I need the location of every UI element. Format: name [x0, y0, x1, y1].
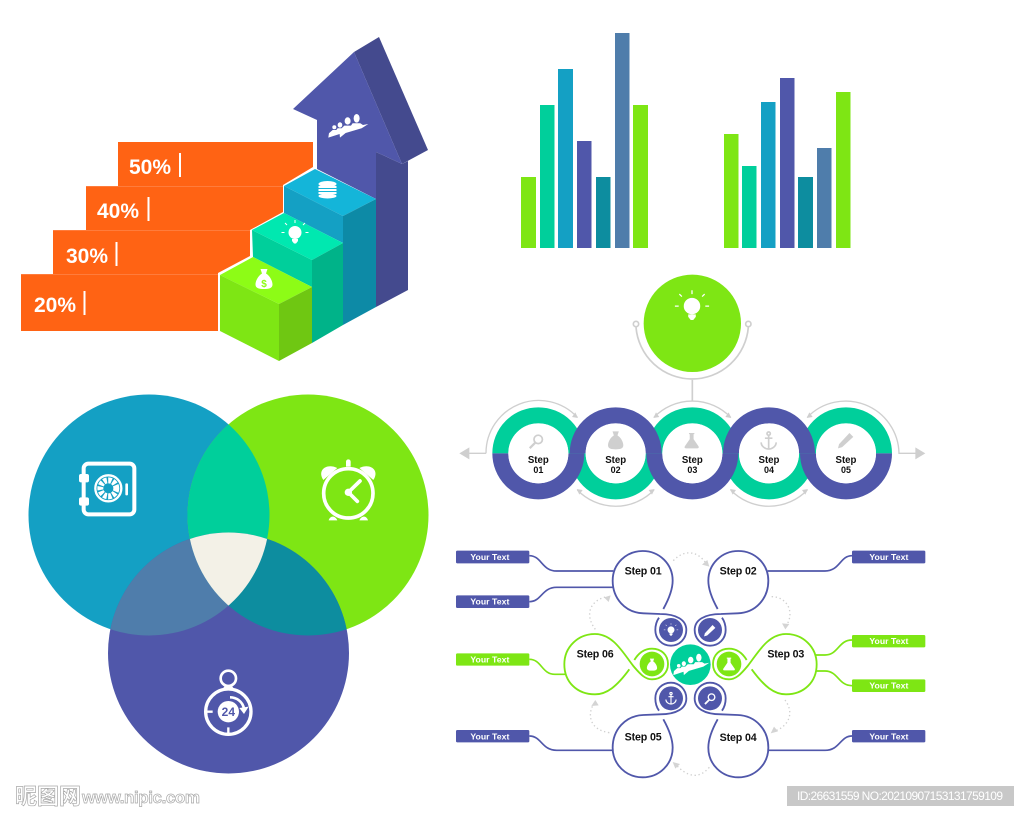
green circle	[188, 394, 428, 636]
step 04	[739, 423, 799, 483]
step 05: Step	[836, 455, 857, 466]
panel: bar chart right	[724, 78, 850, 248]
step 02	[586, 423, 646, 483]
panel: venn diagram	[28, 394, 428, 774]
step titles: Step 02	[720, 566, 757, 578]
your text labels left: Your Text	[470, 655, 509, 665]
icon: money bag	[256, 269, 272, 290]
step 03	[662, 423, 722, 483]
icon: money bag: $	[261, 279, 267, 290]
icon node: flask	[717, 652, 741, 676]
your text labels right: Your Text	[869, 636, 908, 646]
label: 30%: 30%	[66, 245, 108, 268]
centre team circle	[670, 644, 711, 685]
label: 20%: 20%	[34, 294, 76, 317]
panel: six step flower diagram	[456, 551, 925, 777]
step 01: 01	[533, 465, 543, 475]
your text labels right: Your Text	[869, 552, 908, 562]
panel: five step chain	[459, 275, 925, 506]
your text labels right	[852, 551, 925, 742]
icon node: money bag	[640, 652, 664, 676]
your text labels right: Your Text	[869, 731, 908, 741]
teal step	[252, 213, 343, 343]
watermark: nipic logo	[15, 779, 200, 811]
your text labels left: Your Text	[470, 731, 509, 741]
watermark: id box: ID:26631559 NO:20210907153131759109	[797, 789, 1003, 803]
step 01: Step	[528, 455, 549, 466]
your text labels right: Your Text	[869, 681, 908, 691]
overlap of all three	[190, 532, 267, 606]
top green circle with bulb	[644, 275, 741, 372]
watermark: nipic logo: 昵图网	[15, 779, 81, 811]
watermark: id box	[787, 786, 1014, 806]
step 04: Step	[759, 455, 780, 466]
step 06 petal	[564, 634, 668, 694]
step 01	[508, 423, 568, 483]
green ring halves	[500, 415, 884, 491]
step 04: 04	[764, 465, 774, 475]
step titles: Step 05	[625, 732, 662, 744]
step 02: Step	[605, 455, 626, 466]
your text labels left: Your Text	[470, 597, 509, 607]
step titles: Step 06	[577, 649, 614, 661]
panel: isometric growth staircase	[21, 37, 428, 361]
blue circle	[28, 394, 270, 636]
icon: 24 hour stopwatch: 24	[222, 705, 235, 719]
icon node: pencil	[698, 618, 722, 642]
step 01 petal	[613, 551, 686, 646]
step titles	[577, 566, 804, 744]
overlap green and purple	[190, 532, 347, 636]
icon node: anchor	[659, 686, 683, 710]
step 02 petal	[695, 551, 768, 646]
dotted flow arrows	[590, 553, 790, 775]
step 03: Step	[682, 455, 703, 466]
connector lines	[529, 556, 852, 750]
overlap blue and purple	[110, 532, 267, 636]
step titles: Step 01	[625, 566, 662, 578]
blue step	[284, 169, 376, 325]
step 03: 03	[687, 465, 697, 475]
icon: light bulb	[282, 220, 308, 244]
label: 40%: 40%	[97, 200, 139, 223]
panel: bar chart left	[521, 33, 648, 248]
connector arc below top circle	[633, 321, 751, 401]
purple growth arrow	[293, 37, 428, 307]
green step	[220, 257, 312, 361]
step titles: Step 04	[720, 732, 757, 744]
grey flow arrows	[459, 400, 925, 506]
purple ring halves	[500, 415, 884, 491]
step titles: Step 03	[767, 649, 804, 661]
overlap blue and green	[188, 424, 270, 539]
watermark: nipic logo: www.nipic.com	[81, 788, 200, 807]
icon node: bulb	[659, 618, 683, 642]
icon: safe	[79, 464, 134, 514]
icon: team on arrow	[328, 114, 368, 138]
icon: coin stack	[318, 181, 336, 198]
icon: 24 hour stopwatch	[206, 671, 251, 734]
your text labels left	[456, 551, 529, 742]
dotted arrowheads	[591, 560, 789, 769]
your text labels left: Your Text	[470, 552, 509, 562]
step 05: 05	[841, 465, 851, 475]
step 03 petal	[713, 634, 817, 694]
orange percentage steps	[21, 142, 313, 331]
step 05	[816, 423, 876, 483]
purple circle	[108, 532, 349, 774]
step 05 petal	[613, 683, 686, 777]
step 04 petal	[695, 683, 768, 777]
label: 50%: 50%	[129, 156, 171, 179]
icon: alarm clock	[321, 459, 375, 520]
icon node: magnifier	[698, 686, 722, 710]
step 02: 02	[611, 465, 621, 475]
